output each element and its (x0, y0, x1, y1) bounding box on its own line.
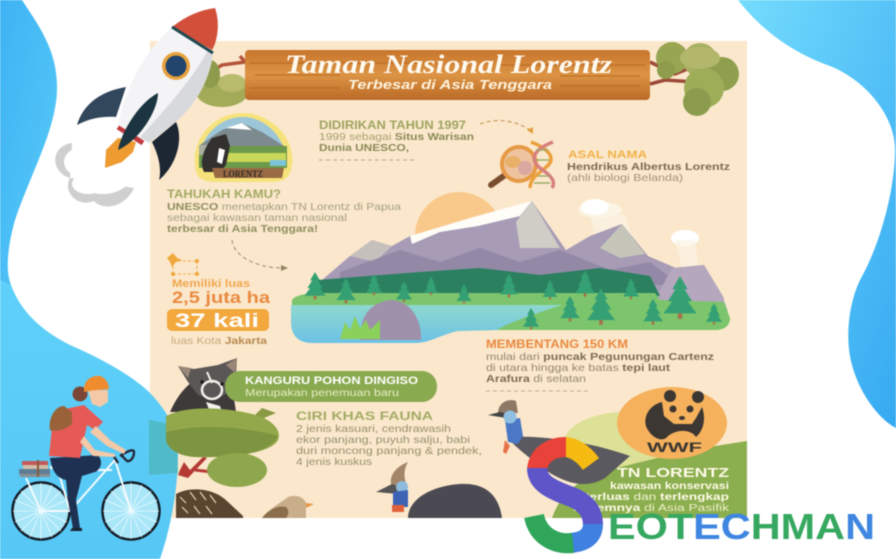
cyclist blue blob (0, 280, 178, 559)
panel: infographic poster background (150, 41, 747, 518)
text block: ciri khas fauna: 2 jenis kasuari, cendrawasih (296, 423, 451, 435)
stat: 37 kali pill: 37 kali (175, 311, 259, 332)
title text: Taman Nasional Lorentz (285, 50, 613, 79)
clouds (578, 199, 700, 280)
center fin (118, 93, 158, 150)
text block: TN Lorentz: TN LORENTZ (617, 465, 729, 480)
right fin (152, 122, 179, 180)
icon: WWF panda circle (617, 387, 727, 459)
S mark (534, 447, 593, 543)
icon: rocket (55, 8, 218, 207)
mountains (320, 201, 728, 312)
text block: asal nama (567, 149, 730, 184)
text block: didirikan tahun 1997: DIDIRIKAN TAHUN 1997 (319, 120, 466, 132)
text block: didirikan tahun 1997 (319, 120, 474, 160)
tree foliage left (196, 60, 248, 107)
face (88, 390, 108, 407)
icon: Lorentz park badge (195, 113, 292, 182)
text block: tahukah kamu (167, 189, 401, 235)
text block: tahukah kamu: UNESCO menetapkan TN Lorentz di Papua (167, 201, 401, 213)
trees (304, 271, 722, 329)
neck (505, 418, 523, 444)
branch left (214, 56, 245, 84)
text block: ciri khas fauna (296, 411, 482, 468)
shirt (49, 405, 103, 458)
body (118, 27, 213, 143)
wattle (503, 440, 510, 454)
text block: ciri khas fauna: 4 jenis kuskus (296, 456, 372, 468)
text block: membentang 150 km: di utara hingga ke batas tepi laut (486, 362, 671, 374)
overlap tint box (149, 420, 178, 475)
crest (498, 400, 518, 413)
left fin (77, 87, 126, 125)
callout pill: kanguru pohon dingiso (225, 371, 437, 402)
leg (50, 455, 101, 529)
text block: tahukah kamu: TAHUKAH KAMU? (167, 189, 281, 201)
text block: TN Lorentz: terluas dan terlengkap (585, 491, 729, 503)
helmet (84, 376, 109, 392)
head and ears (178, 358, 237, 400)
illustration: tree kangaroo dingiso (170, 358, 237, 412)
ground (292, 293, 730, 331)
subtitle text: Terbesar di Asia Tenggara (348, 77, 552, 92)
illustration: cassowary bottom (376, 462, 502, 518)
muzzle marks (202, 381, 222, 399)
text block: ciri khas fauna: duri moncong panjang & pendek, (296, 445, 482, 457)
red band (118, 127, 143, 143)
badge name: LORENTZ (223, 169, 263, 179)
arm (90, 426, 126, 454)
arrow: dashed to asal nama (480, 121, 533, 134)
stat: area of park (172, 278, 271, 307)
text: luas kota jakarta: luas Kota Jakarta (171, 336, 268, 347)
nose cone (172, 8, 218, 50)
callout pill: kanguru pohon dingiso: KANGURU POHON DINGISO (245, 375, 419, 387)
body (645, 402, 704, 439)
sun (415, 192, 503, 280)
lake (291, 305, 562, 343)
text block: tahukah kamu: sebagai kawasan taman nasional (167, 212, 347, 224)
icon: map area marker (167, 253, 199, 276)
text block: TN Lorentz (573, 465, 730, 514)
forest band (305, 268, 660, 296)
illustration: mountain lake scene (291, 192, 730, 343)
text block: ciri khas fauna: CIRI KHAS FAUNA (296, 411, 433, 423)
body (507, 437, 630, 484)
stat: area of park: 2,5 juta ha (172, 288, 271, 307)
text block: membentang 150 km: MEMBENTANG 150 KM (486, 339, 628, 351)
text block: didirikan tahun 1997: Dunia UNESCO, (319, 142, 409, 154)
illustration: echidna (176, 489, 243, 518)
head (504, 410, 516, 424)
beak (488, 412, 508, 418)
hair bun (72, 386, 88, 402)
text block: TN Lorentz: sistemnya di Asia Pasifik (573, 502, 730, 514)
eyes and nose (670, 406, 676, 412)
arrow: dashed to mountains (232, 240, 288, 271)
bicycle (12, 450, 160, 540)
body (170, 382, 236, 412)
illustration: small bird (262, 496, 314, 518)
text block: membentang 150 km (486, 339, 714, 391)
illustration: cyclist (12, 376, 160, 540)
text block: membentang 150 km: Arafura di selatan (486, 373, 586, 385)
grass (340, 316, 380, 339)
text block: asal nama: Hendrikus Albertus Lorentz (567, 161, 730, 173)
tree right (650, 42, 739, 116)
rock (360, 300, 421, 340)
logo: SEOTECHMAN (534, 447, 875, 547)
illustration: bush leaves (166, 408, 279, 487)
text block: ciri khas fauna: ekor panjang, puyuh salju, babi (296, 434, 470, 446)
ears (664, 390, 676, 402)
illustration: cassowary top (488, 400, 630, 484)
wwf label: WWF (647, 439, 703, 455)
backpack (50, 406, 72, 431)
text block: tahukah kamu: terbesar di Asia Tenggara! (167, 223, 318, 235)
books rack (19, 460, 50, 477)
text block: TN Lorentz: kawasan konservasi (610, 480, 729, 492)
text block: asal nama: (ahli biologi Belanda) (567, 172, 683, 184)
flame (105, 138, 136, 168)
right blue wave (738, 0, 896, 428)
left top blue wave (0, 0, 57, 310)
wood plank sign (245, 50, 650, 100)
window (162, 52, 190, 80)
callout pill: kanguru pohon dingiso: Merupakan penemuan baru (245, 388, 399, 399)
illustration: green hill (552, 412, 747, 518)
text block: asal nama: ASAL NAMA (568, 149, 647, 161)
banner: wooden title sign with trees (196, 42, 739, 116)
smoke (55, 143, 134, 207)
wordmark: EOT ECHMA N (608, 506, 875, 547)
text block: membentang 150 km: mulai dari puncak Pegunungan Cartenz (486, 351, 714, 363)
stat: 37 kali pill (167, 309, 269, 332)
stat: area of park: Memiliki luas (172, 278, 250, 290)
icon: magnifier and DNA (491, 142, 554, 188)
text block: didirikan tahun 1997: 1999 sebagai Situs Warisan (319, 131, 474, 143)
